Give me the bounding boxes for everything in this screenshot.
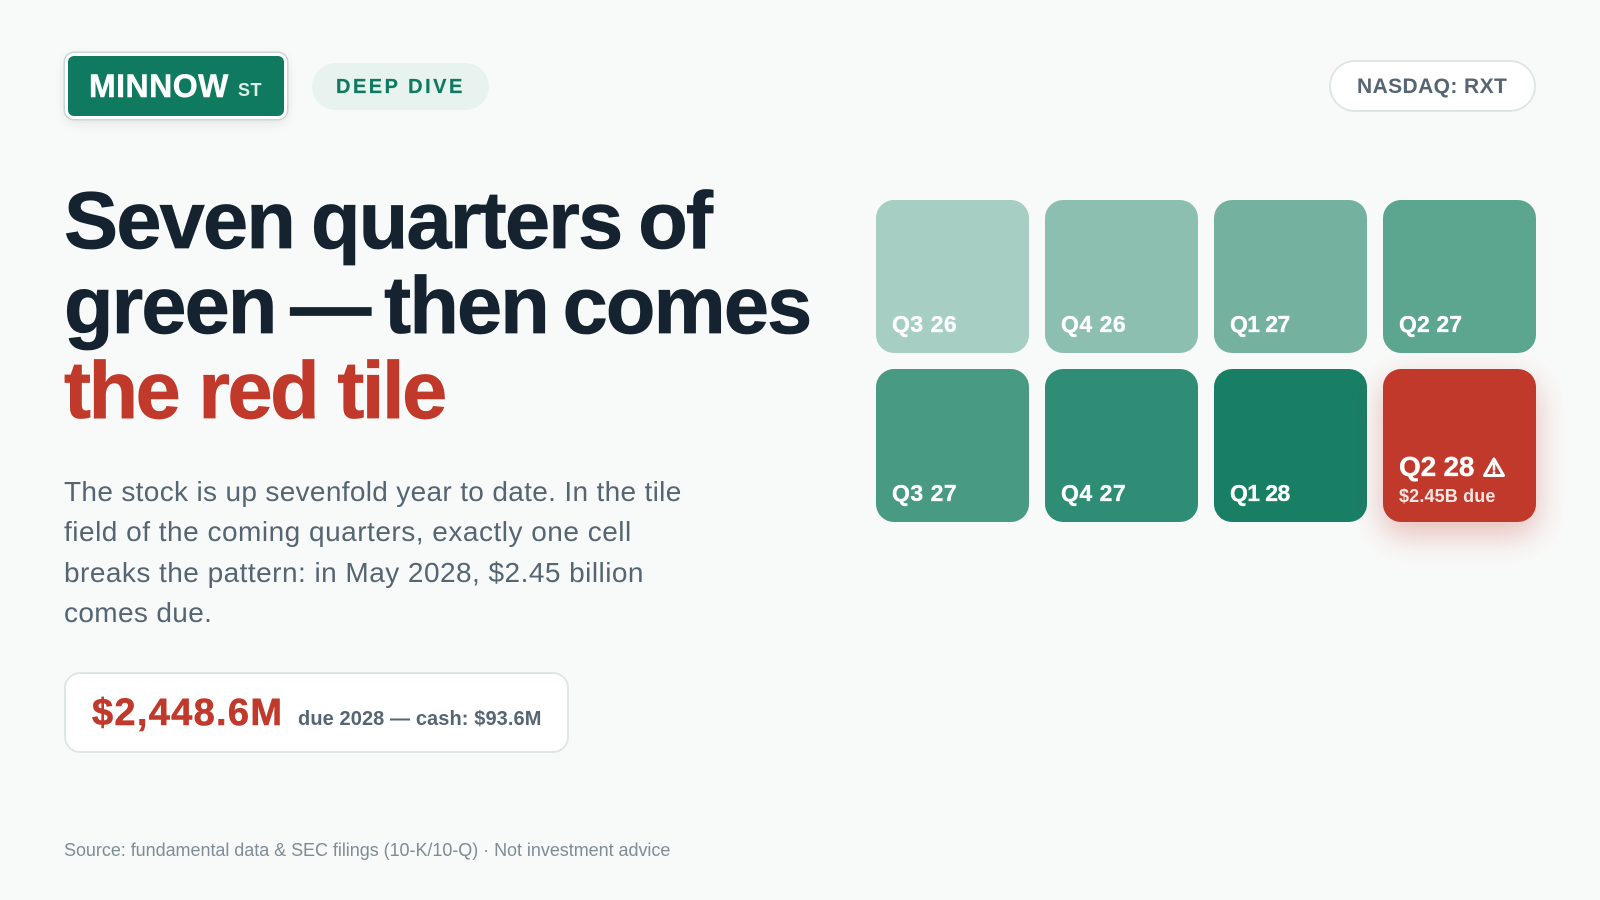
tile: Q1 27 xyxy=(1214,200,1367,353)
tile: Q2 27: Q2 27 xyxy=(1399,311,1462,337)
tile: Q1 27: Q1 27 xyxy=(1230,311,1290,337)
tile: Q1 28: Q1 28 xyxy=(1230,480,1290,506)
brand name: MINNOW xyxy=(89,68,229,104)
debt callout xyxy=(64,672,569,753)
tag text: DEEP DIVE xyxy=(336,76,465,98)
tile: Q3 27: Q3 27 xyxy=(892,480,957,506)
tile: Q4 27 xyxy=(1045,369,1198,522)
brand sign: Minnow St xyxy=(64,52,286,118)
intro paragraph xyxy=(64,476,682,628)
headline accent: the red tile xyxy=(64,346,445,436)
tile: Q2 28 highlighted xyxy=(1383,369,1536,522)
source note: Source: fundamental data & SEC filings (10-K/10-Q) · Not investment advice xyxy=(64,840,670,860)
tile: Q3 27 xyxy=(876,369,1029,522)
headline: Seven quarters of xyxy=(64,176,711,266)
ticker pill xyxy=(1329,60,1536,112)
tile: Q3 26 xyxy=(876,200,1029,353)
ticker text: NASDAQ: RXT xyxy=(1357,75,1507,98)
headline: green — then comes xyxy=(64,261,810,351)
tile: Q3 26: Q3 26 xyxy=(892,311,957,337)
tile: Q2 27 xyxy=(1383,200,1536,353)
tile: Q4 26 xyxy=(1045,200,1198,353)
intro paragraph: comes due. xyxy=(64,597,212,628)
intro paragraph: breaks the pattern: in May 2028, $2.45 billion xyxy=(64,557,644,588)
tile: Q1 28 xyxy=(1214,369,1367,522)
icon: warning triangle xyxy=(1483,457,1506,477)
tile label: Q2 28 xyxy=(1399,451,1474,482)
tile: Q4 26: Q4 26 xyxy=(1061,311,1126,337)
tile sublabel: $2.45B due xyxy=(1399,486,1496,506)
headline xyxy=(64,176,810,436)
tile: Q4 27: Q4 27 xyxy=(1061,480,1126,506)
debt amount: $2,448.6M xyxy=(92,692,283,734)
quarter tile grid xyxy=(876,200,1554,552)
brand suffix: ST xyxy=(238,80,262,100)
debt context: due 2028 — cash: $93.6M xyxy=(298,708,542,730)
intro paragraph: The stock is up sevenfold year to date. In the tile xyxy=(64,476,682,507)
tag pill: deep dive xyxy=(312,63,489,110)
intro paragraph: field of the coming quarters, exactly one cell xyxy=(64,516,632,547)
